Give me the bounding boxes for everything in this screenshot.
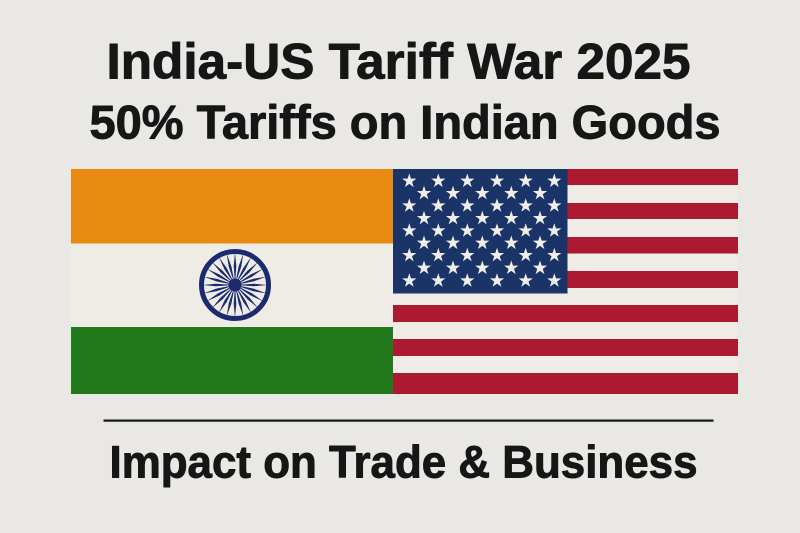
title line 2: 50% Tariffs on Indian Goods (90, 95, 720, 148)
saffron band (71, 169, 393, 244)
subtitle: Impact on Trade & Business (110, 436, 698, 487)
flag: India (71, 169, 393, 394)
title (90, 34, 720, 148)
white band (71, 244, 393, 327)
title line 1: India-US Tariff War 2025 (106, 34, 690, 90)
icon: Ashoka Chakra (202, 252, 268, 318)
stripes (393, 169, 738, 394)
flag: United States (393, 169, 738, 394)
green band (71, 327, 393, 394)
star canton (393, 169, 568, 294)
